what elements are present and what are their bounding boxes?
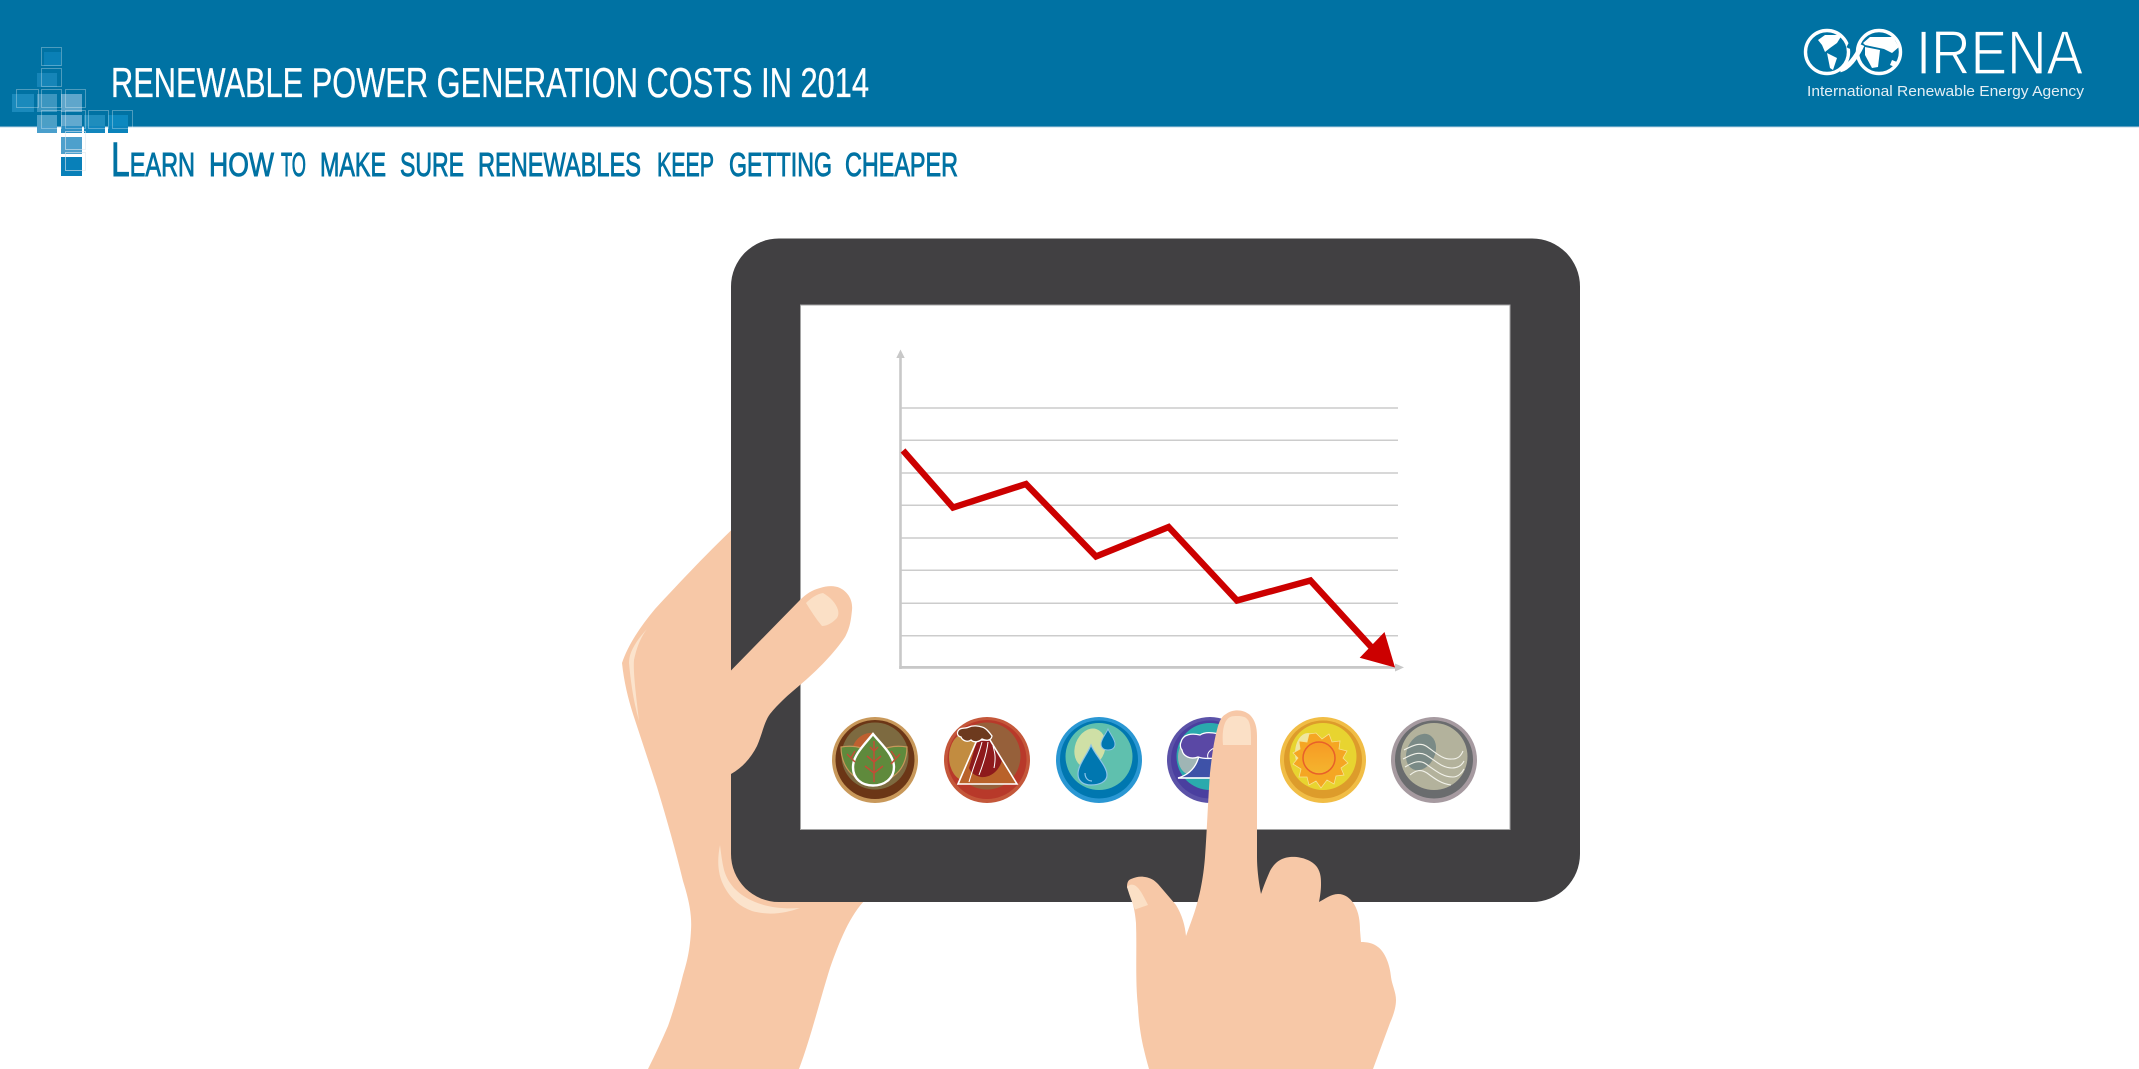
- title: RENEWABLE POWER GENERATION COSTS IN 2014: [111, 59, 869, 106]
- subtitle: MAKE: [320, 147, 386, 184]
- tablet screen: [800, 305, 1510, 830]
- left hand and arm behind tablet: [622, 522, 866, 1069]
- subtitle: GETTING: [729, 147, 832, 184]
- subtitle: SURE: [400, 147, 464, 184]
- subtitle: CHEAPER: [845, 147, 958, 184]
- subtitle: LEARN: [111, 134, 195, 187]
- logo tagline: International Renewable Energy Agency: [1807, 83, 2085, 100]
- red arrowhead: [1360, 632, 1395, 668]
- icon: wind: [1391, 717, 1477, 803]
- icon: ocean wave: [1167, 717, 1253, 803]
- header band: [0, 0, 2139, 127]
- tablet body: [731, 238, 1580, 902]
- logo: IRENA: [1806, 19, 2085, 100]
- icon: bioenergy leaves: [832, 717, 918, 803]
- subtitle: RENEWABLES: [478, 147, 641, 184]
- subtitle: KEEP: [657, 147, 714, 184]
- logo wordmark: IRENA: [1916, 19, 2084, 88]
- red declining line: [903, 450, 1374, 650]
- subtitle: HOW: [209, 147, 274, 184]
- line chart with falling arrow: [896, 350, 1404, 672]
- icon: infinity globes: [1806, 30, 1900, 74]
- icon: hydropower water drops: [1056, 717, 1142, 803]
- left thumb: [725, 586, 852, 778]
- subtitle: [111, 134, 958, 187]
- chart axes: [896, 350, 1404, 672]
- icon: geothermal volcano: [944, 717, 1030, 803]
- icon: solar sun: [1280, 717, 1366, 803]
- hand highlights: [629, 629, 647, 721]
- thumb nail right: [1127, 885, 1148, 910]
- right hand with pointing finger: [1127, 710, 1396, 1069]
- decorative cross of squares: [12, 48, 132, 176]
- index finger nail: [1223, 716, 1251, 745]
- thumb nail: [806, 593, 838, 626]
- subtitle: TO: [281, 147, 306, 184]
- chart grid lines: [900, 408, 1398, 636]
